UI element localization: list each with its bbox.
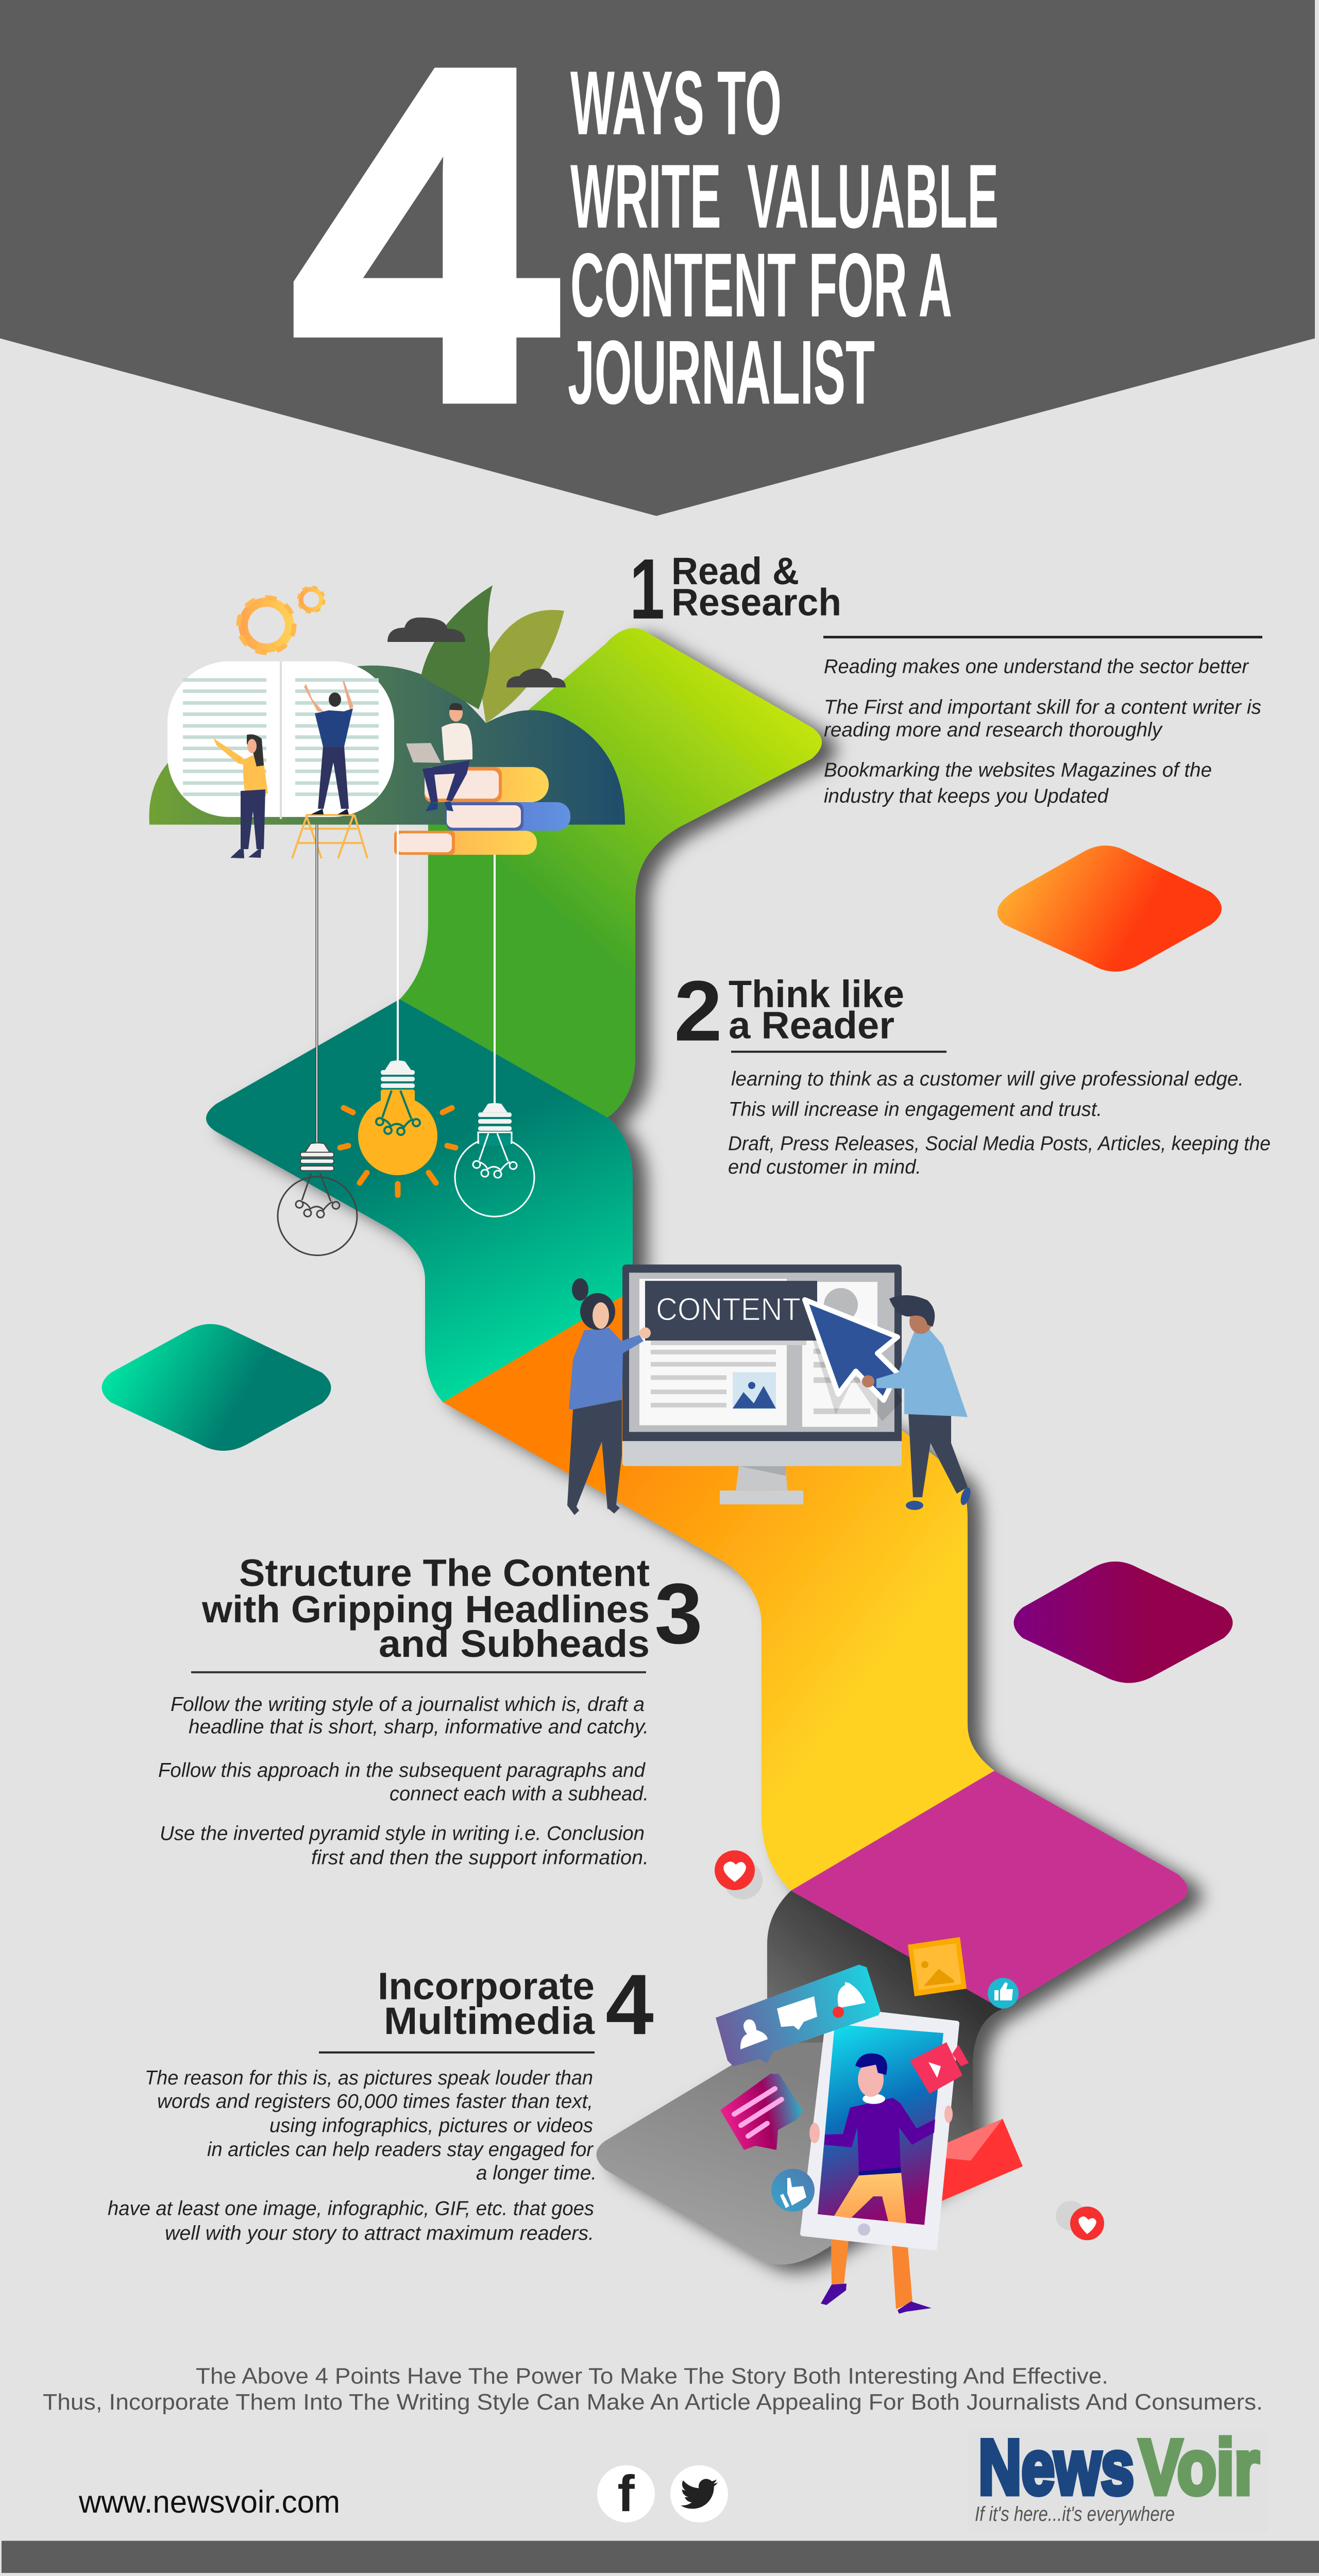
gear small: [298, 587, 324, 613]
floating diamond: green: [102, 1324, 331, 1451]
dark leaf: [421, 585, 493, 709]
heading: with Gripping Headlines: [201, 1587, 650, 1631]
heading: Incorporate: [378, 1964, 595, 2008]
small thumb badge: [988, 1978, 1019, 2009]
heading: [671, 549, 841, 623]
person legs: [821, 2239, 932, 2314]
ribbon: green section: [400, 628, 822, 1117]
body text: Follow this approach in the subsequent paragraphs and: [158, 1759, 646, 1782]
body text: headline that is short, sharp, informative and catchy.: [189, 1716, 649, 1738]
body text: a longer time.: [476, 2162, 597, 2184]
left article panel: [639, 1279, 787, 1425]
illustration: reading scene: [149, 585, 625, 858]
icon: twitter: [670, 2465, 728, 2522]
numeral 4: 4: [605, 1957, 654, 2053]
body text: words and registers 60,000 times faster than text,: [157, 2091, 593, 2113]
title line 1: WAYS TO: [570, 52, 782, 154]
icon: facebook: [597, 2465, 655, 2522]
logo: newsvoir: [968, 2424, 1268, 2532]
body text: [158, 1693, 649, 1869]
woman in yellow: [213, 734, 268, 858]
ribbon: teal section: [206, 999, 633, 1402]
olive leaf: [479, 610, 564, 723]
right article panel: [802, 1282, 877, 1427]
body text: industry that keeps you Updated: [824, 785, 1109, 807]
body text: in articles can help readers stay engaged for: [207, 2139, 594, 2161]
woman in blue: [567, 1278, 651, 1515]
hanging light bulbs: [278, 825, 534, 1256]
cursor arrow: [805, 1300, 898, 1400]
body text: well with your story to attract maximum readers.: [165, 2222, 594, 2244]
monitor stand: [720, 1466, 803, 1504]
body text: This will increase in engagement and trust.: [729, 1098, 1102, 1121]
cloud left: [387, 617, 465, 642]
body text: end customer in mind.: [728, 1156, 921, 1178]
center lit bulb: [340, 1060, 455, 1195]
illustration: content monitor scene: [567, 1264, 972, 1515]
logo tagline: If it's here...it's everywhere: [975, 2503, 1175, 2526]
body text: [728, 1068, 1271, 1178]
man on ladder: [304, 681, 353, 815]
wire center: [397, 825, 399, 1061]
picture thumbnail: [733, 1372, 776, 1409]
heading: [378, 1964, 595, 2042]
content header box: [645, 1281, 817, 1341]
winding ribbon: [206, 628, 1188, 2265]
body text: have at least one image, infographic, GIF, etc. that goes: [108, 2198, 594, 2220]
thumb badge large: [771, 2169, 815, 2212]
closing statement: The Above 4 Points Have The Power To Make The Story Both Interesting And Effective.: [196, 2364, 1108, 2389]
wire left: [315, 825, 318, 1143]
notification bubble: [716, 1964, 881, 2066]
heading: Read &: [671, 549, 799, 592]
title: [292, 0, 999, 499]
heart badge lower: [1056, 2201, 1104, 2240]
cloud right: [506, 669, 566, 687]
ladder: [292, 815, 367, 858]
monitor frame: [622, 1264, 902, 1441]
numeral 1: 1: [630, 541, 665, 637]
numeral 3: 3: [654, 1566, 703, 1662]
body text: Reading makes one understand the sector better: [824, 656, 1249, 677]
body text: Use the inverted pyramid style in writing i.e. Conclusion: [160, 1823, 645, 1845]
heading: Research: [671, 581, 841, 623]
ribbon: orange to yellow section: [443, 1296, 994, 1891]
left outline bulb: [278, 1143, 357, 1256]
rule: [731, 1050, 946, 1053]
ribbon: magenta diamond: [791, 1771, 1188, 2009]
body text: reading more and research thoroughly: [824, 719, 1163, 741]
website url: www.newsvoir.com: [78, 2484, 340, 2520]
bush background: [149, 666, 625, 825]
person on screen: [809, 2054, 953, 2224]
yellow image card: [908, 1937, 967, 1996]
icon: facebook: f: [617, 2466, 635, 2522]
rule: [319, 2052, 595, 2054]
body text: Bookmarking the websites Magazines of the: [824, 759, 1212, 781]
ribbon: dark gray section: [767, 1891, 1002, 2249]
red envelope: [918, 2119, 1023, 2202]
phone body: [803, 2009, 957, 2248]
title line 3: CONTENT FOR A: [570, 234, 952, 336]
numeral 2: 2: [674, 963, 722, 1059]
video badge: [910, 2042, 969, 2094]
wire right: [494, 855, 496, 1104]
text lines: [651, 1341, 870, 1414]
illustration: smartphone social media scene: [715, 1851, 1104, 2314]
floating diamond: purple: [1014, 1562, 1232, 1683]
body text: The First and important skill for a content writer is: [824, 697, 1261, 719]
logo word voir: Voir: [1139, 2424, 1259, 2511]
body text: Follow the writing style of a journalist which is, draft a: [171, 1693, 645, 1716]
closing statement: Thus, Incorporate Them Into The Writing Style Can Make An Article Appealing For Both Journalists And Consumers.: [43, 2389, 1263, 2415]
body text: using infographics, pictures or videos: [269, 2114, 593, 2137]
right outline bulb: [455, 1103, 534, 1216]
logo word news: News: [978, 2424, 1134, 2511]
heading: a Reader: [729, 1004, 894, 1047]
man in light blue: [862, 1295, 972, 1510]
content label: CONTENT: [656, 1292, 801, 1327]
gear large: [239, 598, 294, 653]
body text: [108, 2067, 597, 2244]
body text: [824, 656, 1261, 807]
heart badge upper: [715, 1851, 763, 1900]
rule: [823, 636, 1262, 638]
closing statement: [43, 2364, 1263, 2415]
heading: Think like: [729, 973, 904, 1015]
body text: first and then the support information.: [311, 1846, 649, 1869]
section 3: structure the content: [158, 1551, 703, 1869]
heading: and Subheads: [379, 1622, 650, 1665]
section 4: incorporate multimedia: [108, 1957, 654, 2244]
monitor chin: [622, 1434, 902, 1466]
pink text bubble: [720, 2074, 803, 2150]
heading: Structure The Content: [239, 1551, 650, 1594]
heading: [729, 973, 904, 1047]
body text: connect each with a subhead.: [390, 1783, 649, 1805]
floating diamond: orange: [997, 845, 1222, 972]
stack of books: [394, 767, 570, 855]
title line 4: JOURNALIST: [568, 321, 875, 423]
header banner: [0, 0, 1315, 516]
section 2: think like a reader: [674, 963, 1271, 1178]
avatar placeholder: [824, 1288, 858, 1321]
phone button: [858, 2224, 870, 2235]
body text: The reason for this is, as pictures speak louder than: [145, 2067, 593, 2089]
section 1: read and research: [630, 541, 1262, 807]
open book: [167, 662, 394, 819]
bottom bar: [2, 2541, 1319, 2573]
phone screen: [818, 2024, 943, 2225]
heading: [201, 1551, 650, 1665]
cursor shadow: [813, 1340, 903, 1421]
ribbon: gray diamond: [597, 2041, 876, 2265]
monitor screen: [629, 1273, 894, 1432]
rule: [191, 1671, 646, 1673]
body text: learning to think as a customer will give professional edge.: [731, 1068, 1244, 1090]
body text: Draft, Press Releases, Social Media Posts, Articles, keeping the: [728, 1133, 1271, 1155]
heading: Multimedia: [384, 1999, 595, 2042]
seated man with laptop: [406, 703, 472, 811]
